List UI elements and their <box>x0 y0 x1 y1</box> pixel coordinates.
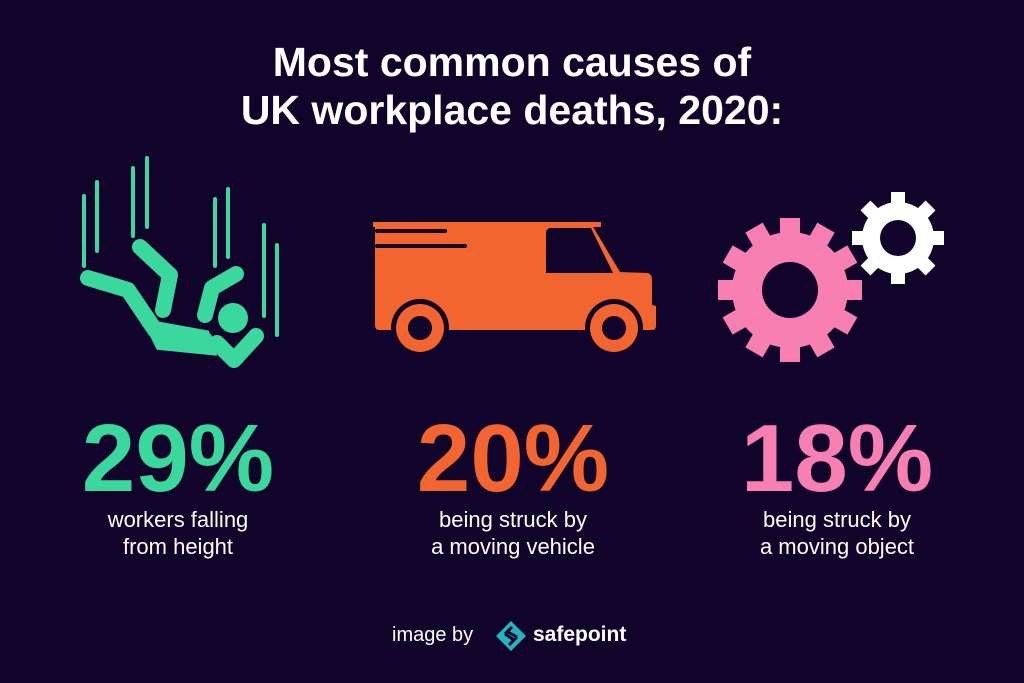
footer credit <box>392 621 626 651</box>
caption: falling: workers falling <box>108 507 248 532</box>
caption: vehicle: a moving vehicle <box>431 534 595 559</box>
caption: vehicle: being struck by <box>439 507 587 532</box>
caption: falling <box>108 507 248 559</box>
caption: object <box>760 507 914 559</box>
caption: falling: from height <box>123 534 233 559</box>
caption: object: being struck by <box>763 507 911 532</box>
footer credit: image by <box>392 624 473 646</box>
caption: vehicle <box>431 507 595 559</box>
stat: 20%: 20% <box>417 405 609 512</box>
title: UK workplace deaths, 2020: <box>241 87 783 133</box>
stat: 29%: 29% <box>82 405 274 512</box>
caption: object: a moving object <box>760 534 914 559</box>
icon: safepoint logo <box>496 621 526 651</box>
title: Most common causes of <box>273 39 751 85</box>
title <box>241 39 783 133</box>
stat: 18%: 18% <box>741 405 933 512</box>
footer credit: safepoint <box>533 623 626 646</box>
